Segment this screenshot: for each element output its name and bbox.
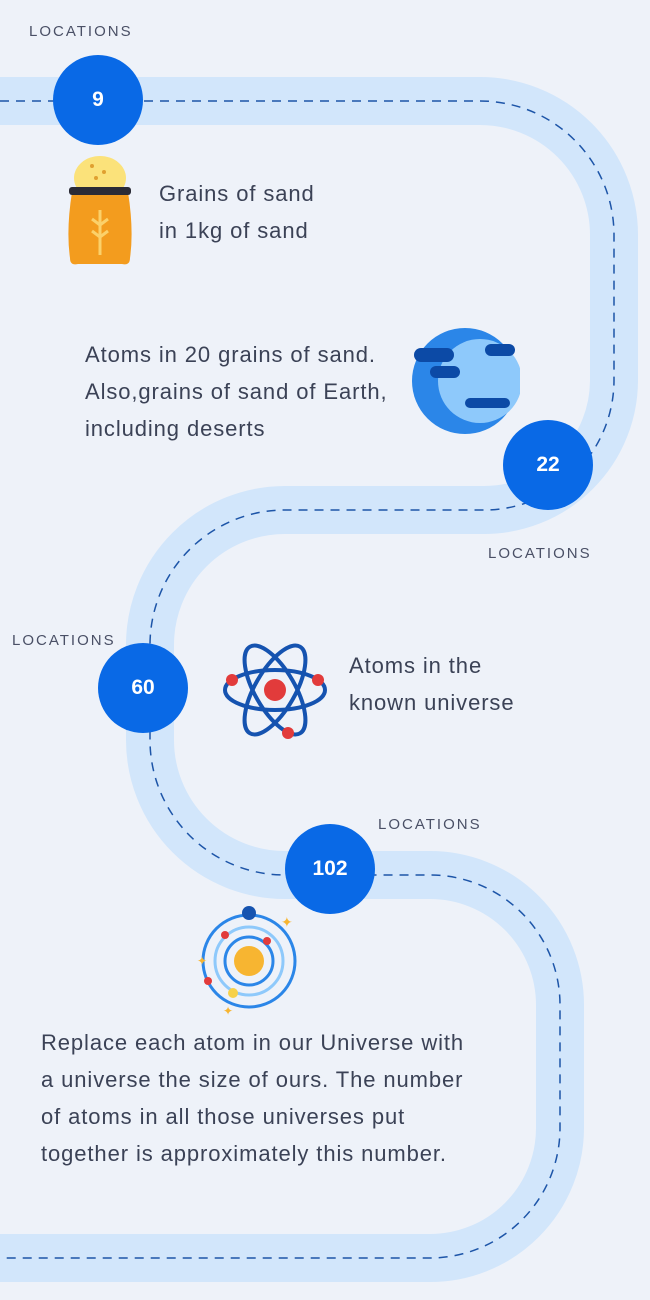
icon: sand bag (68, 156, 132, 264)
label: locations 1: LOCATIONS (29, 23, 133, 40)
text: atoms in the universe: Atoms in the (349, 653, 482, 678)
text: replace each atom (41, 1030, 464, 1166)
marker 60: 60 (131, 676, 155, 699)
text: grains of sand: Grains of sand (159, 181, 315, 206)
text: replace each atom: a universe the size of ours. The number (41, 1067, 463, 1092)
marker 22 (503, 420, 593, 510)
marker 60 (98, 643, 188, 733)
text: atoms in 20 grains: including deserts (85, 416, 265, 441)
icon: galaxy (197, 906, 296, 1018)
marker 22: 22 (536, 453, 560, 476)
icon: atom (223, 644, 327, 739)
text: replace each atom: Replace each atom in our Universe with (41, 1030, 464, 1055)
label: locations 3: LOCATIONS (12, 632, 116, 649)
marker 102: 102 (312, 857, 348, 880)
text: atoms in 20 grains: Also,grains of sand of Earth, (85, 379, 387, 404)
text: replace each atom: together is approximately this number. (41, 1141, 447, 1166)
icon: galaxy: ✦ (281, 914, 293, 930)
label: locations 2: LOCATIONS (488, 545, 592, 562)
text: grains of sand: in 1kg of sand (159, 218, 309, 243)
text: atoms in 20 grains (85, 342, 387, 441)
text: atoms in the universe: known universe (349, 690, 514, 715)
icon: galaxy: ✦ (197, 954, 207, 968)
text: atoms in 20 grains: Atoms in 20 grains of sand. (85, 342, 376, 367)
marker 9 (53, 55, 143, 145)
marker 102 (285, 824, 375, 914)
text: grains of sand (159, 181, 315, 243)
text: replace each atom: of atoms in all those universes put (41, 1104, 405, 1129)
icon: earth (412, 328, 520, 434)
marker 9: 9 (92, 88, 104, 111)
icon: galaxy: ✦ (223, 1004, 233, 1018)
text: atoms in the universe (349, 653, 514, 715)
label: locations 4: LOCATIONS (378, 816, 482, 833)
